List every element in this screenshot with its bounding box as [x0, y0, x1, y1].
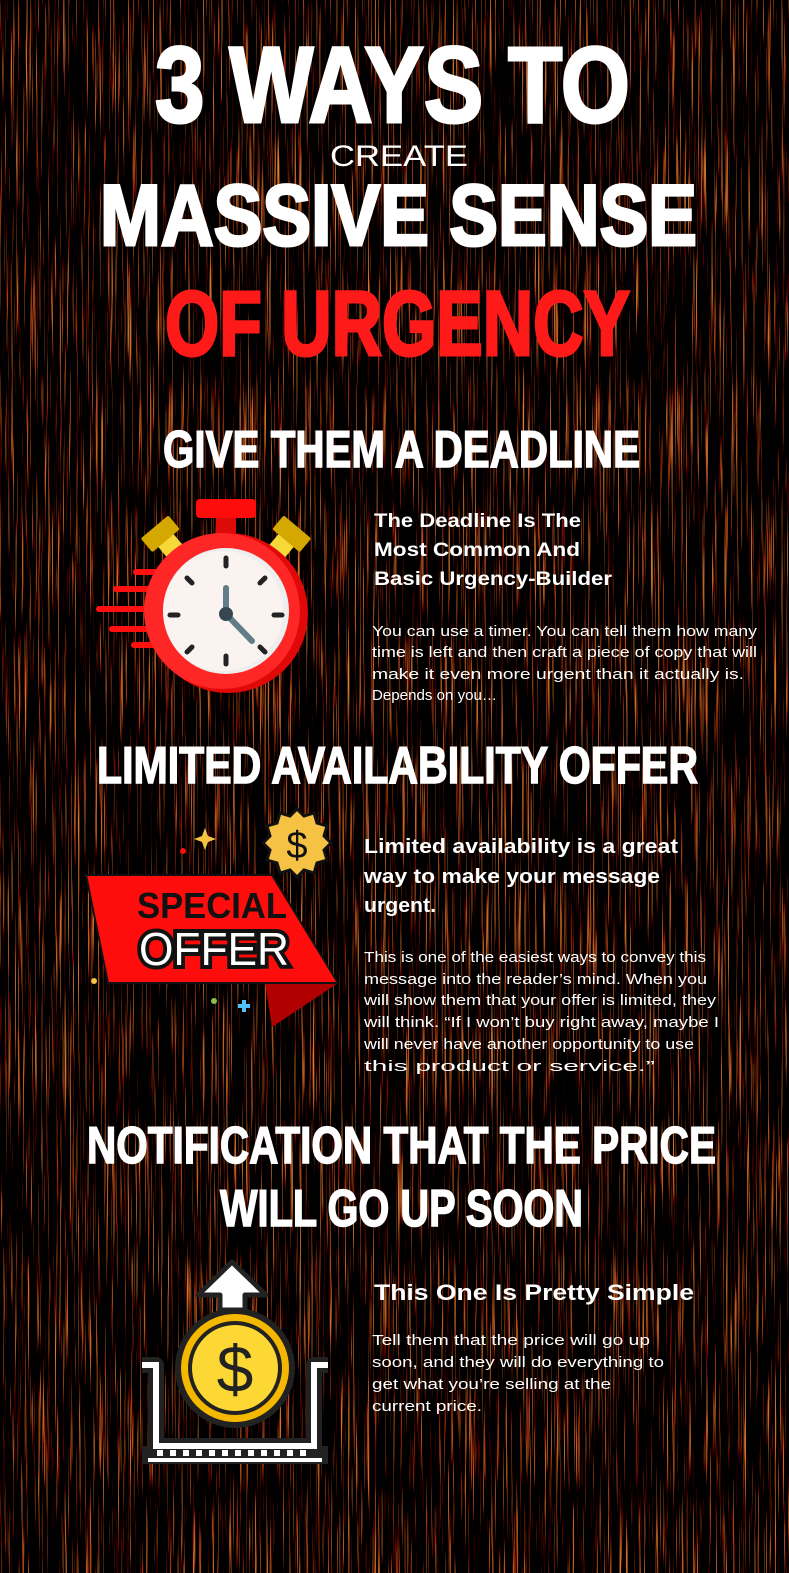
icon: price going up: $	[217, 1332, 253, 1406]
text block: limited availability: way to make your message	[363, 866, 660, 888]
text block: price goes up	[372, 1280, 694, 1415]
icon: price going up	[142, 1262, 328, 1464]
text block: deadline: Most Common And	[374, 540, 580, 561]
text block: deadline: The Deadline Is The	[374, 511, 581, 532]
text block: limited availability: This is one of the easiest ways to convey this	[364, 949, 706, 966]
title: MASSIVE SENSE	[100, 168, 697, 264]
text block: limited availability: Limited availability is a great	[364, 836, 678, 858]
heading: give them a deadline: GIVE THEM A DEADLINE	[163, 421, 640, 479]
text block: deadline: Depends on you…	[372, 687, 497, 704]
icon: special offer badge	[86, 809, 338, 1027]
heading: notification that the price will go up soon: WILL GO UP SOON	[220, 1180, 583, 1238]
text block: limited availability: will show them that your offer is limited, they	[363, 992, 717, 1009]
icon: stopwatch	[99, 499, 311, 693]
title: CREATE	[330, 140, 468, 173]
text block: limited availability: this product or service.”	[364, 1058, 655, 1075]
text block: price goes up: soon, and they will do everything to	[372, 1354, 664, 1371]
text block: deadline: You can use a timer. You can tell them how many	[372, 623, 758, 640]
text block: limited availability: will never have another opportunity to use	[363, 1036, 694, 1053]
icon: special offer badge: $	[286, 825, 308, 867]
text block: deadline	[372, 511, 758, 704]
text block: limited availability	[363, 836, 719, 1075]
text block: price goes up: This One Is Pretty Simple	[374, 1280, 694, 1305]
title: OF URGENCY	[165, 273, 630, 375]
text block: price goes up: Tell them that the price will go up	[372, 1332, 650, 1349]
text block: limited availability: will think. “If I won’t buy right away, maybe I	[363, 1014, 719, 1031]
text block: deadline: make it even more urgent than it actually is.	[372, 666, 744, 683]
icon: special offer badge: SPECIAL	[137, 885, 287, 926]
text block: limited availability: urgent.	[364, 895, 436, 917]
icon: special offer badge: OFFER	[139, 923, 289, 975]
title: 3 WAYS TO	[155, 24, 630, 145]
text block: price goes up: get what you’re selling at the	[372, 1376, 611, 1393]
text block: deadline: Basic Urgency-Builder	[374, 569, 613, 590]
text block: price goes up: current price.	[372, 1398, 482, 1415]
title	[100, 24, 697, 375]
text block: deadline: time is left and then craft a piece of copy that will	[372, 644, 757, 661]
text block: limited availability: message into the reader’s mind. When you	[364, 971, 707, 988]
heading: notification that the price will go up soon	[87, 1117, 716, 1238]
